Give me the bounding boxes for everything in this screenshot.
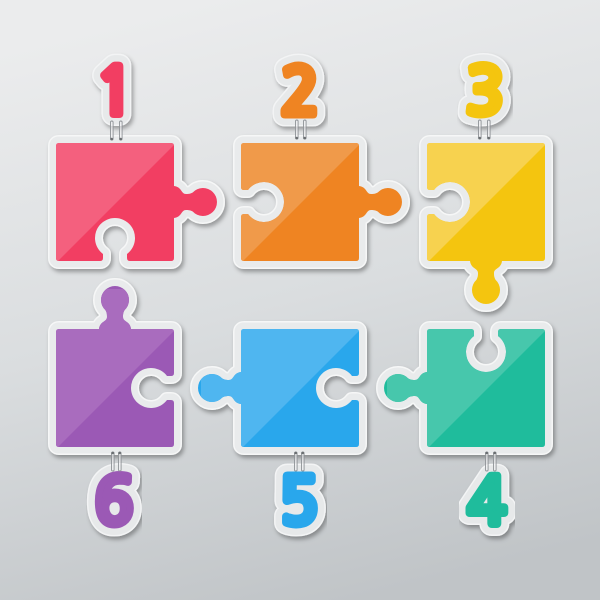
panel: piece 2 orange <box>241 60 402 261</box>
number 2: 2 <box>280 60 320 124</box>
paper clips 6 <box>111 452 121 471</box>
number 3: 3 <box>465 60 505 124</box>
number 4: 4 <box>467 470 507 534</box>
jigsaw shape 5 <box>198 329 359 447</box>
panel: piece 4 green <box>384 329 545 534</box>
number 1: 1 <box>95 60 135 124</box>
panel: piece 1 pink <box>56 60 217 261</box>
number 3: 3 <box>465 60 505 124</box>
jigsaw shape 4 <box>384 329 545 447</box>
panel: piece 5 blue <box>198 329 359 534</box>
panel: piece 3 yellow <box>427 60 545 304</box>
number 5: 5 <box>279 470 319 534</box>
paper clips 1 <box>110 121 122 140</box>
paper clips 4 <box>485 452 496 471</box>
jigsaw shape 3 <box>427 143 545 304</box>
panel: piece 6 purple <box>56 286 174 534</box>
number 3: 3 <box>465 60 505 124</box>
number 4: 4 <box>467 470 507 534</box>
jigsaw shape 2 <box>241 143 402 261</box>
number 5: 5 <box>279 470 319 534</box>
paper clips 5 <box>294 452 304 471</box>
number 6: 6 <box>94 470 134 534</box>
number 4: 4 <box>467 470 507 534</box>
number 6: 6 <box>94 470 134 534</box>
number 5: 5 <box>279 470 319 534</box>
number 6: 6 <box>94 470 134 534</box>
paper clips 3 <box>478 120 490 139</box>
paper clips 2 <box>295 120 306 139</box>
jigsaw shape 1 <box>56 143 217 261</box>
number 1: 1 <box>95 60 135 124</box>
number 2: 2 <box>280 60 320 124</box>
jigsaw shape 6 <box>56 286 174 447</box>
number 2: 2 <box>280 60 320 124</box>
number 1: 1 <box>95 60 135 124</box>
